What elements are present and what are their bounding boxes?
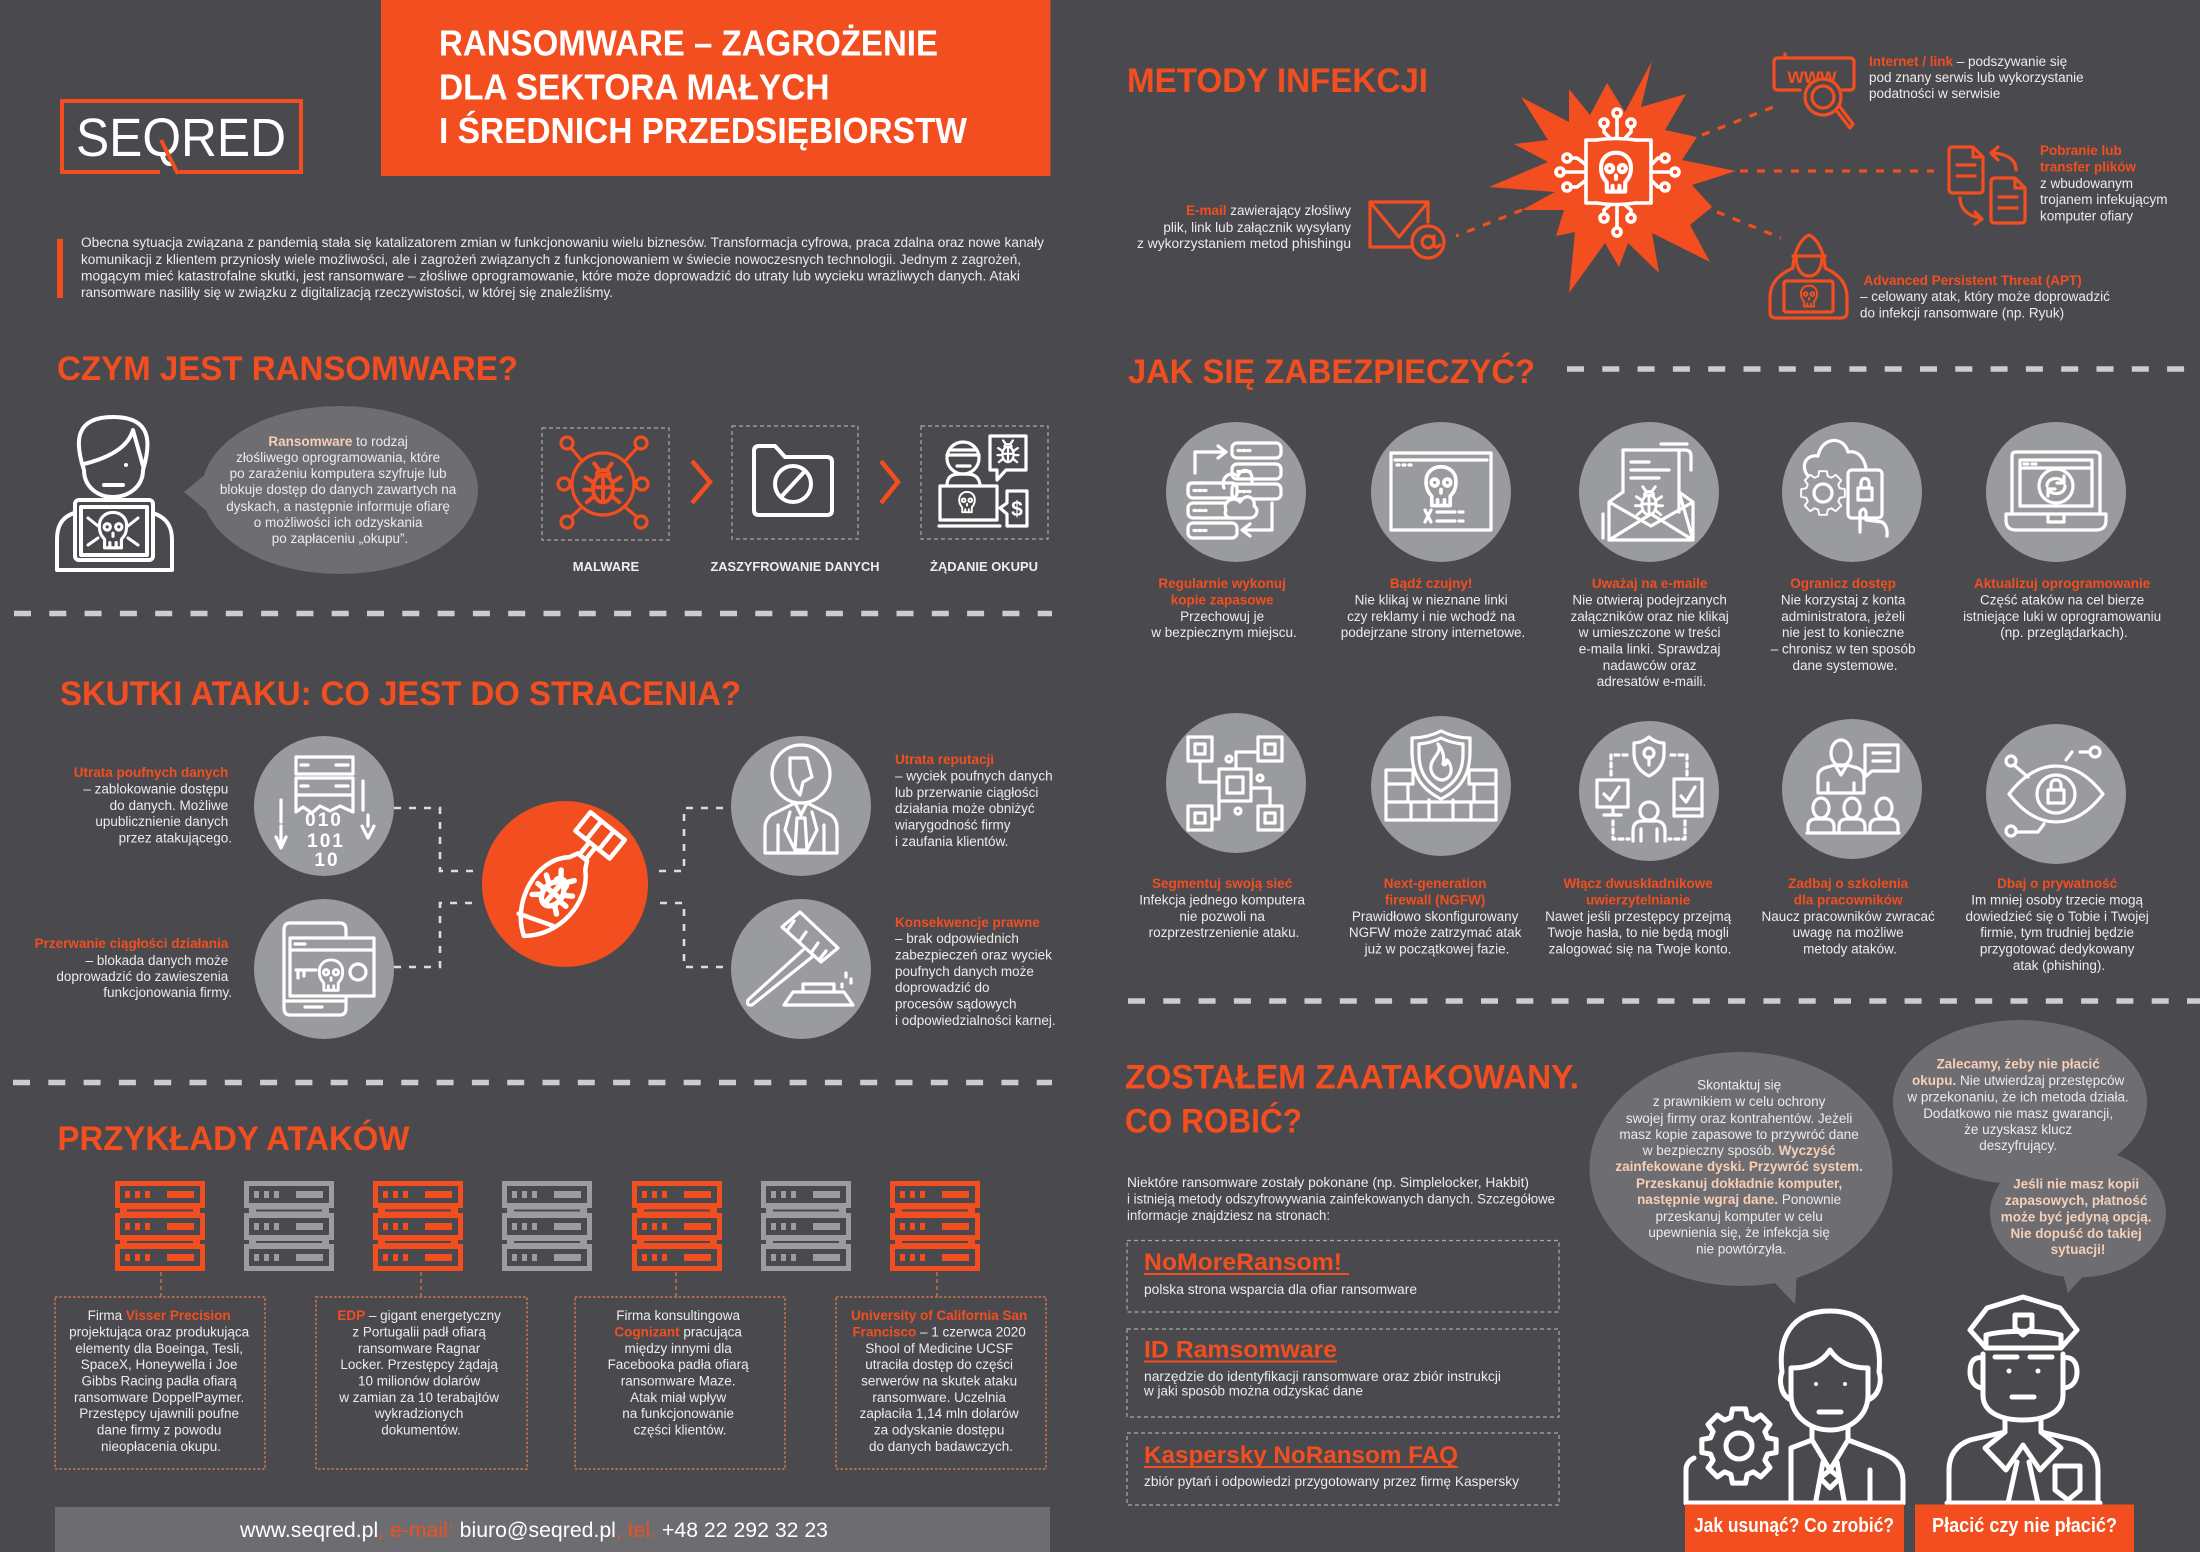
speech bubble: what to do: Skontaktuj się bbox=[1697, 1078, 1781, 1093]
speech bubble: what to do: nie powtórzyła. bbox=[1696, 1242, 1786, 1256]
icon: IT specialist with gear bbox=[1686, 1311, 1903, 1503]
protection text: limit access: nie jest to konieczne bbox=[1782, 625, 1904, 640]
intro paragraph: komunikacji z klientem przyniosły wiele możliwości, ale i zagrożeń związanych z funkcjonowaniem w świecie nowoczesnych technologii. Jednym z zagrożeń, bbox=[81, 252, 1021, 267]
text: APT: – celowany atak, który może doprowadzić bbox=[1860, 289, 2110, 304]
text: loss of confidential data: do danych. Możliwe bbox=[110, 798, 228, 813]
example: Visser Precision: Visser Precision bbox=[126, 1308, 231, 1323]
example: UCSF: Shool of Medicine UCSF bbox=[865, 1341, 1013, 1356]
speech bubble: what to do: masz kopie zapasowe to przywróć dane bbox=[1619, 1127, 1859, 1142]
protection text: stay alert: Nie klikaj w nieznane linki bbox=[1355, 592, 1508, 608]
text: legal consequences: zabezpieczeń oraz wyciek bbox=[895, 948, 1052, 962]
protection icon: segment network bbox=[1166, 713, 1306, 853]
server icons row bbox=[115, 1181, 980, 1271]
protection text: careful with email: Nie otwieraj podejrzanych bbox=[1572, 592, 1727, 608]
link box: ID Ransomware: w jaki sposób można odzyskać dane bbox=[1143, 1384, 1363, 1399]
text: reputation: lub przerwanie ciągłości bbox=[895, 785, 1038, 800]
protection icon: stay alert bbox=[1371, 422, 1511, 562]
intro paragraph: mogącym mieć katastrofalne skutki, jest ransomware – złośliwe oprogramowanie, które może doprowadzić do utraty lub wycieku wrażliwych danych. Ataki bbox=[81, 268, 1020, 284]
protection text: privacy: firmie, tym trudniej będzie bbox=[1980, 925, 2134, 940]
example: EDP: w zamian za 10 terabajtów bbox=[338, 1390, 499, 1405]
example: EDP: ransomware Ragnar bbox=[358, 1341, 481, 1356]
button: how to remove: Jak usunąć? Co zrobić? bbox=[1694, 1515, 1894, 1537]
protection text: careful with email: załączników oraz nie klikaj bbox=[1570, 609, 1729, 624]
speech bubble: do not pay: w przekonaniu, że ich metoda działa. bbox=[1906, 1089, 2129, 1104]
protection text: training: dla pracowników bbox=[1794, 892, 1903, 908]
protection text: careful with email: nadawców oraz bbox=[1603, 658, 1697, 673]
example: Cognizant: Firma konsultingowa bbox=[616, 1308, 741, 1323]
example: UCSF: do danych badawczych. bbox=[869, 1439, 1013, 1454]
effect icon: business interruption bbox=[254, 899, 394, 1039]
connectors: attack effects bbox=[394, 808, 723, 967]
arrow bbox=[881, 461, 898, 503]
text: APT: Advanced Persistent Threat (APT) bbox=[1864, 273, 2082, 288]
example: EDP bbox=[316, 1272, 527, 1469]
text: legal consequences: i odpowiedzialności karnej. bbox=[895, 1013, 1056, 1028]
dashed links: infection vectors bbox=[1456, 104, 1934, 238]
example: Cognizant: części klientów. bbox=[633, 1422, 727, 1438]
example: UCSF: Francisco bbox=[852, 1324, 916, 1340]
effect icon: data loss bbox=[254, 736, 394, 876]
heading: przykłady ataków: PRZYKŁADY ATAKÓW bbox=[58, 1120, 410, 1158]
text: APT: do infekcji ransomware (np. Ryuk) bbox=[1860, 306, 2064, 320]
text: loss of confidential data: przez atakującego. bbox=[119, 830, 232, 846]
text: internet link: podatności w serwisie bbox=[1869, 86, 2000, 101]
text: file transfer: z wbudowanym bbox=[2040, 176, 2133, 191]
effect icon: legal consequences bbox=[731, 899, 871, 1039]
speech bubble: do not pay: Zalecamy, żeby nie płacić bbox=[1936, 1056, 2100, 1072]
speech bubble: do not pay: okupu. bbox=[1912, 1073, 1956, 1088]
speech bubble: do not pay bbox=[1893, 1020, 2166, 1293]
protection text: privacy: Dbaj o prywatność bbox=[1997, 876, 2118, 891]
speech bubble: ransomware definition: to rodzaj bbox=[352, 434, 408, 449]
example: EDP: z Portugalii padł ofiarą bbox=[352, 1324, 486, 1340]
example: EDP: dokumentów. bbox=[381, 1422, 461, 1438]
speech bubble: ransomware definition bbox=[184, 406, 478, 574]
text: decryption intro: i istnieją metody odszyfrowywania zainfekowanych danych. Szczegółowe bbox=[1127, 1192, 1555, 1206]
speech bubble: what to do: Przeskanuj dokładnie komputer, bbox=[1636, 1176, 1842, 1191]
link box: NoMoreRansom bbox=[1127, 1240, 1559, 1312]
example: Cognizant: Atak miał wpływ bbox=[630, 1390, 726, 1405]
example: UCSF: ransomware. Uczelnia bbox=[872, 1390, 1006, 1405]
step: ransom demand: $ bbox=[1011, 498, 1023, 521]
protection icon: privacy bbox=[1986, 724, 2126, 864]
protection text: update software: Część ataków na cel bierze bbox=[1980, 592, 2144, 608]
protection text: careful with email: e-maila linki. Sprawdzaj bbox=[1579, 642, 1721, 656]
text: file transfer: trojanem infekującym bbox=[2040, 192, 2168, 207]
speech bubble: what to do: z prawnikiem w celu ochrony bbox=[1653, 1094, 1826, 1109]
example: UCSF: utraciła dostęp do części bbox=[865, 1357, 1013, 1372]
protection text: firewall: już w początkowej fazie. bbox=[1364, 942, 1509, 956]
text: file transfer: komputer ofiary bbox=[2040, 208, 2133, 224]
speech bubble: do not pay: Jeśli nie masz kopii bbox=[2013, 1177, 2139, 1192]
speech bubble: what to do: upewnienia się, że infekcja się bbox=[1648, 1225, 1830, 1240]
protection text: stay alert: Bądź czujny! bbox=[1390, 576, 1472, 591]
protection text: privacy: atak (phishing). bbox=[2013, 958, 2105, 973]
example: Cognizant bbox=[575, 1272, 785, 1469]
link box: ID Ransomware: narzędzie do identyfikacji ransomware oraz zbiór instrukcji bbox=[1144, 1369, 1501, 1384]
protection text: two-factor: Nawet jeśli przestępcy przejmą bbox=[1545, 909, 1732, 924]
speech bubble: do not pay: Dodatkowo nie masz gwarancji, bbox=[1923, 1106, 2113, 1121]
icon: www search: www bbox=[1786, 65, 1837, 88]
text: loss of confidential data: Utrata poufnych danych bbox=[74, 765, 228, 780]
text: email: E-mail zawierający złośliwy bbox=[1186, 203, 1351, 218]
effect icon: data loss: 101 bbox=[307, 831, 345, 852]
speech bubble: do not pay: zapasowych, płatność bbox=[2005, 1193, 2148, 1208]
protection text: segment network: rozprzestrzenienie ataku. bbox=[1149, 925, 1299, 940]
protection text: limit access: – chronisz w ten sposób bbox=[1771, 642, 1916, 656]
text: decryption intro: informacje znajdziesz na stronach: bbox=[1127, 1208, 1330, 1223]
heading: czym jest ransomware: CZYM JEST RANSOMWARE? bbox=[57, 350, 518, 388]
protection text: privacy: Im mniej osoby trzecie mogą bbox=[1971, 892, 2144, 908]
icon: policeman bbox=[1947, 1297, 2100, 1503]
link box: Kaspersky: zbiór pytań i odpowiedzi przygotowany przez firmę Kaspersky bbox=[1144, 1474, 1519, 1489]
text: reputation: wiarygodność firmy bbox=[894, 818, 1011, 832]
protection text: backups: kopie zapasowe bbox=[1171, 592, 1274, 608]
example: UCSF: serwerów na skutek ataku bbox=[861, 1374, 1017, 1388]
protection text: careful with email: Uważaj na e-maile bbox=[1592, 576, 1708, 591]
footer contact bar bbox=[55, 1507, 1050, 1552]
heading: zostałem zaatakowany: CO ROBIĆ? bbox=[1125, 1103, 1302, 1141]
step: ransom demand: ŻĄDANIE OKUPU bbox=[930, 559, 1038, 574]
step: malware: MALWARE bbox=[573, 559, 640, 574]
text: legal consequences: procesów sądowych bbox=[895, 996, 1017, 1012]
link box: ID Ransomware bbox=[1127, 1329, 1559, 1417]
example: EDP: Locker. Przestępcy żądają bbox=[340, 1357, 498, 1372]
example: EDP: – gigant energetyczny bbox=[365, 1308, 501, 1323]
example: UCSF: zapłaciła 1,14 mln dolarów bbox=[860, 1406, 1019, 1421]
example: Cognizant: na funkcjonowanie bbox=[622, 1406, 734, 1421]
speech bubble: ransomware definition: blokuje dostęp do danych zawartych na bbox=[220, 482, 457, 497]
protection text: backups: Przechowuj je bbox=[1180, 609, 1264, 624]
example: Visser Precision: ransomware DoppelPaymer. bbox=[74, 1390, 244, 1405]
protection text: two-factor: Twoje hasła, to nie będą mogli bbox=[1547, 925, 1729, 940]
example: Cognizant: Facebooka padła ofiarą bbox=[608, 1357, 749, 1372]
speech bubble: do not pay: Nie utwierdzaj przestępców bbox=[1956, 1073, 2125, 1088]
example: Cognizant: ransomware Maze. bbox=[621, 1374, 736, 1388]
example: Visser Precision: Gibbs Racing padła ofiarą bbox=[81, 1374, 237, 1388]
link box: Kaspersky: Kaspersky NoRansom FAQ bbox=[1144, 1442, 1458, 1469]
speech bubble: do not pay: deszyfrujący. bbox=[1979, 1138, 2057, 1153]
protection text: firewall: NGFW może zatrzymać atak bbox=[1349, 925, 1522, 940]
effect icon: reputation bbox=[731, 736, 871, 876]
text: reputation: i zaufania klientów. bbox=[895, 834, 1008, 849]
protection text: training: uwagę na możliwe bbox=[1793, 925, 1904, 940]
title banner: I ŚREDNICH PRZEDSIĘBIORSTW bbox=[439, 109, 967, 151]
protection text: firewall: firewall (NGFW) bbox=[1385, 892, 1485, 908]
text: loss of confidential data: – zablokowanie dostępu bbox=[83, 782, 228, 796]
title banner: RANSOMWARE – ZAGROŻENIE bbox=[439, 22, 938, 64]
speech bubble: what to do bbox=[1590, 1052, 1892, 1304]
text: business continuity: – blokada danych może bbox=[86, 953, 228, 968]
protection text: backups: Regularnie wykonuj bbox=[1158, 576, 1286, 591]
protection icon: firewall bbox=[1371, 716, 1511, 856]
speech bubble: ransomware definition: dyskach, a następnie informuje ofiarę bbox=[226, 499, 450, 514]
text: legal consequences: – brak odpowiednich bbox=[895, 931, 1019, 946]
protection text: two-factor: zalogować się na Twoje konto. bbox=[1549, 942, 1731, 956]
speech bubble: ransomware definition: po zarażeniu komputera szyfruje lub bbox=[230, 466, 447, 481]
protection icon: two-factor bbox=[1579, 721, 1719, 861]
protection text: limit access: Ogranicz dostęp bbox=[1790, 576, 1896, 591]
speech bubble: ransomware definition: złośliwego oprogramowania, które bbox=[236, 450, 440, 465]
intro paragraph bbox=[57, 235, 1044, 300]
link box: ID Ransomware: ID Ramsomware bbox=[1144, 1336, 1337, 1364]
example: Visser Precision: nieopłacenia okupu. bbox=[101, 1439, 221, 1454]
protection icon: update software bbox=[1986, 422, 2126, 562]
protection text: training: metody ataków. bbox=[1803, 942, 1897, 956]
text: reputation: – wyciek poufnych danych bbox=[895, 768, 1053, 784]
text: internet link: – podszywanie się bbox=[1953, 54, 2067, 69]
speech bubble: do not pay: sytuacji! bbox=[2051, 1242, 2105, 1257]
protection text: stay alert: czy reklamy i nie wchodź na bbox=[1347, 609, 1516, 624]
text: business continuity: funkcjonowania firmy. bbox=[103, 985, 232, 1000]
icon: file transfer bbox=[1949, 147, 2025, 224]
protection text: segment network: nie pozwoli na bbox=[1179, 909, 1265, 924]
protection text: limit access: administratora, jeżeli bbox=[1781, 609, 1905, 624]
example: Cognizant: Cognizant bbox=[614, 1324, 680, 1340]
speech bubble: ransomware definition: po zapłaceniu „okupu”. bbox=[272, 531, 408, 546]
protection icon: careful with email bbox=[1579, 422, 1719, 562]
example: Visser Precision: Firma bbox=[88, 1308, 126, 1323]
speech bubble: what to do: w bezpieczny sposób. bbox=[1642, 1143, 1779, 1158]
protection text: firewall: Next-generation bbox=[1384, 876, 1487, 891]
example: EDP: wykradzionych bbox=[374, 1406, 463, 1421]
protection icon: backups bbox=[1166, 422, 1306, 562]
example: EDP: 10 milionów dolarów bbox=[358, 1374, 481, 1388]
text: loss of confidential data: upublicznienie danych bbox=[95, 814, 228, 829]
protection text: careful with email: w umieszczone w treści bbox=[1578, 625, 1721, 640]
step: malware bbox=[542, 428, 669, 574]
text: file transfer: Pobranie lub bbox=[2040, 143, 2122, 158]
step: data encryption: ZASZYFROWANIE DANYCH bbox=[710, 559, 880, 574]
text: decryption intro: Niektóre ransomware zostały pokonane (np. Simplelocker, Hakbit) bbox=[1127, 1175, 1529, 1190]
heading: skutki ataku: SKUTKI ATAKU: CO JEST DO STRACENIA? bbox=[60, 675, 741, 713]
protection text: update software: Aktualizuj oprogramowanie bbox=[1974, 576, 2151, 591]
protection text: firewall: Prawidłowo skonfigurowany bbox=[1352, 909, 1519, 924]
logo: SEQRED: SEQRED bbox=[76, 108, 286, 168]
protection text: careful with email: adresatów e-maili. bbox=[1597, 674, 1706, 689]
example: UCSF: za odyskanie dostępu bbox=[874, 1422, 1004, 1438]
text: reputation: Utrata reputacji bbox=[895, 752, 994, 767]
heading: zostałem zaatakowany bbox=[1125, 1058, 1579, 1141]
button: pay or not: Płacić czy nie płacić? bbox=[1932, 1515, 2117, 1537]
step: data encryption bbox=[710, 426, 880, 574]
icon: APT hacker bbox=[1770, 235, 1847, 318]
protection icon: training bbox=[1782, 719, 1922, 859]
speech bubble: do not pay: Nie dopuść do takiej bbox=[2010, 1226, 2142, 1241]
text: legal consequences: doprowadzić do bbox=[895, 980, 990, 995]
intro paragraph: ransomware nasiliły się w związku z digitalizacją rzeczywistości, w której się znaleźliśmy. bbox=[81, 285, 613, 300]
text: business continuity: Przerwanie ciągłości działania bbox=[35, 936, 229, 951]
icon: person with infected laptop bbox=[57, 417, 172, 570]
heading: jak się zabezpieczyć: JAK SIĘ ZABEZPIECZYĆ? bbox=[1128, 353, 1535, 391]
protection text: segment network: Infekcja jednego komputera bbox=[1139, 892, 1306, 908]
speech bubble: what to do: zainfekowane dyski. Przywróć system. bbox=[1615, 1159, 1863, 1174]
protection text: two-factor: Włącz dwuskładnikowe bbox=[1563, 876, 1713, 891]
text: internet link: Internet / link bbox=[1869, 54, 1954, 69]
speech bubble: do not pay: że uzyskasz klucz bbox=[1964, 1122, 2072, 1137]
title banner: DLA SEKTORA MAŁYCH bbox=[439, 66, 830, 108]
speech bubble: what to do: przeskanuj komputer w celu bbox=[1655, 1209, 1823, 1224]
heading: metody infekcji: METODY INFEKCJI bbox=[1127, 62, 1428, 100]
example: Visser Precision: Przestępcy ujawnili poufne bbox=[79, 1406, 239, 1421]
text: email: plik, link lub załącznik wysyłany bbox=[1163, 220, 1351, 235]
link box: NoMoreRansom: polska strona wsparcia dla ofiar ransomware bbox=[1144, 1282, 1417, 1297]
effect icon: data loss: 010 bbox=[305, 810, 343, 831]
text: internet link: pod znany serwis lub wykorzystanie bbox=[1869, 70, 2084, 85]
example: Cognizant: między innymi dla bbox=[624, 1341, 732, 1356]
example: Cognizant: pracująca bbox=[680, 1324, 742, 1340]
protection icon: limit access bbox=[1782, 422, 1922, 562]
button: how to remove bbox=[1685, 1504, 1904, 1552]
protection text: privacy: przygotować dedykowany bbox=[1980, 942, 2135, 956]
protection text: limit access: dane systemowe. bbox=[1792, 658, 1898, 673]
protection text: update software: istniejące luki w oprogramowaniu bbox=[1963, 609, 2161, 624]
protection text: training: Naucz pracowników zwracać bbox=[1761, 909, 1935, 924]
heading: zostałem zaatakowany: ZOSTAŁEM ZAATAKOWANY. bbox=[1125, 1058, 1579, 1096]
example: Visser Precision bbox=[55, 1272, 265, 1469]
text: file transfer: transfer plików bbox=[2040, 160, 2137, 174]
example: Visser Precision: projektująca oraz produkująca bbox=[69, 1324, 250, 1340]
speech bubble: do not pay: może być jedyną opcją. bbox=[2001, 1210, 2152, 1225]
text: business continuity: doprowadzić do zawieszenia bbox=[56, 969, 229, 984]
text: decryption intro bbox=[1127, 1175, 1555, 1223]
speech bubble: ransomware definition: o możliwości ich odzyskania bbox=[254, 515, 423, 530]
example: Visser Precision: elementy dla Boeinga, Tesli, bbox=[75, 1341, 243, 1356]
example: UCSF bbox=[836, 1272, 1046, 1469]
icon: email bbox=[1370, 202, 1444, 258]
starburst with chip skull bbox=[1489, 61, 1736, 293]
protection text: privacy: dowiedzieć się o Tobie i Twojej bbox=[1965, 909, 2149, 924]
text: legal consequences: Konsekwencje prawne bbox=[895, 915, 1040, 930]
text: email: z wykorzystaniem metod phishingu bbox=[1137, 236, 1351, 251]
speech bubble: what to do: Wyczyść bbox=[1779, 1143, 1836, 1158]
example: UCSF: University of California San bbox=[851, 1308, 1027, 1323]
speech bubble: ransomware definition: Ransomware bbox=[268, 434, 353, 449]
protection text: two-factor: uwierzytelnianie bbox=[1586, 892, 1691, 908]
example: Visser Precision: SpaceX, Honeywella i Joe bbox=[81, 1357, 238, 1372]
example: EDP: EDP bbox=[337, 1308, 365, 1323]
protection text: segment network: Segmentuj swoją sieć bbox=[1152, 876, 1293, 891]
title banner bbox=[381, 0, 1050, 176]
intro paragraph: Obecna sytuacja związana z pandemią stała się katalizatorem zmian w funkcjonowaniu wielu biznesów. Transformacja cyfrowa, praca zdalna oraz nowe kanały bbox=[81, 235, 1044, 250]
speech bubble: what to do: swojej firmy oraz kontrahentów. Jeżeli bbox=[1626, 1111, 1852, 1126]
speech bubble: what to do: następnie wgraj dane. bbox=[1637, 1192, 1778, 1207]
footer contact bar: www.seqred.pl, e-mail: biuro@seqred.pl, tel. +48 22 292 32 23 bbox=[239, 1519, 828, 1542]
step: ransom demand bbox=[921, 426, 1048, 574]
icon: www search bbox=[1774, 54, 1854, 128]
protection text: limit access: Nie korzystaj z konta bbox=[1781, 592, 1906, 608]
protection text: backups: w bezpiecznym miejscu. bbox=[1150, 625, 1297, 640]
protection text: update software: (np. przeglądarkach). bbox=[2000, 625, 2128, 640]
example: UCSF: – 1 czerwca 2020 bbox=[916, 1324, 1026, 1340]
text: email bbox=[1137, 203, 1351, 251]
example: Visser Precision: dane firmy z powodu bbox=[97, 1422, 221, 1438]
protection text: stay alert: podejrzane strony internetowe. bbox=[1341, 625, 1525, 640]
link box: Kaspersky bbox=[1127, 1433, 1559, 1505]
central bomb icon bbox=[482, 801, 648, 967]
button: pay or not bbox=[1915, 1504, 2134, 1552]
protection text: training: Zadbaj o szkolenia bbox=[1788, 876, 1909, 891]
text: reputation: działania może obniżyć bbox=[895, 801, 1035, 816]
text: legal consequences: poufnych danych może bbox=[895, 964, 1034, 979]
link box: NoMoreRansom: NoMoreRansom! bbox=[1144, 1249, 1342, 1276]
speech bubble: what to do: Ponownie bbox=[1778, 1192, 1841, 1207]
arrow bbox=[692, 461, 710, 503]
effect icon: data loss: 10 bbox=[314, 850, 340, 871]
